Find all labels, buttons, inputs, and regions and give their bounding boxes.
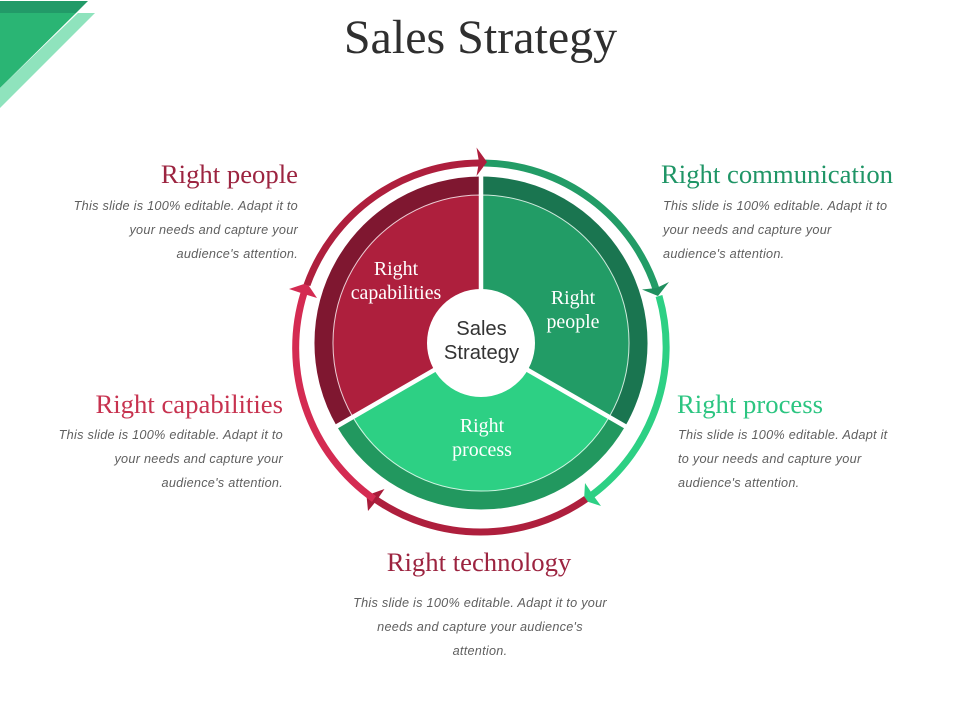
panel: right process text: This slide is 100% editable. Adapt it	[678, 428, 888, 442]
panel: right process text	[677, 389, 888, 490]
label: right people	[546, 287, 600, 333]
chart: segmented circle	[314, 172, 648, 510]
panel: right communication text: audience's attention.	[663, 247, 784, 261]
panel: right people text: your needs and capture your	[128, 223, 299, 237]
panel: right process text: to your needs and capture your	[678, 452, 862, 466]
segment: bottom	[337, 343, 625, 510]
arrow: pink	[289, 283, 374, 499]
panel: right capabilities text: This slide is 100% editable. Adapt it to	[59, 428, 283, 442]
arrow: dark red	[307, 148, 487, 285]
arrow: green	[484, 163, 669, 296]
label: right capabilities: Right	[374, 258, 419, 280]
label: right process: Right	[460, 415, 505, 437]
center label: Strategy	[444, 342, 520, 364]
label: right capabilities: capabilities	[351, 282, 442, 304]
panel: right technology text	[353, 547, 607, 658]
center circle	[427, 289, 535, 397]
panel: right technology text: needs and capture your audience's	[377, 620, 583, 634]
panel: right people text: audience's attention.	[177, 247, 298, 261]
panel: right people text: This slide is 100% editable. Adapt it to	[74, 199, 298, 213]
panel: right capabilities text: audience's attention.	[162, 476, 283, 490]
panel: right people text	[74, 159, 299, 261]
panel: right technology text: attention.	[453, 644, 507, 658]
center label: Sales	[456, 318, 507, 340]
corner decoration	[0, 1, 95, 108]
segment: top left	[314, 176, 481, 426]
panel: right capabilities text	[59, 389, 284, 490]
segment: top right	[481, 176, 648, 426]
panel: right process text: Right process	[677, 389, 823, 419]
label: right people: people	[546, 311, 600, 333]
panel: right capabilities text: your needs and capture your	[113, 452, 284, 466]
label: right capabilities	[351, 258, 442, 304]
panel: right capabilities text: Right capabilities	[95, 389, 283, 419]
panel: right technology text: Right technology	[387, 547, 572, 577]
panel: right communication text	[661, 159, 893, 261]
panel: right technology text: This slide is 100% editable. Adapt it to your	[353, 596, 607, 610]
panel: right communication text: This slide is 100% editable. Adapt it to	[663, 199, 887, 213]
panel: right process text: audience's attention.	[678, 476, 799, 490]
label: right people: Right	[551, 287, 596, 309]
title: Sales Strategy	[344, 11, 617, 64]
panel: right communication text: Right communication	[661, 159, 893, 189]
arrow: light green	[584, 296, 666, 506]
label: right process	[452, 415, 512, 461]
center label	[444, 318, 520, 364]
panel: right people text: Right people	[161, 159, 298, 189]
label: right process: process	[452, 439, 512, 461]
arrow: crimson	[366, 489, 586, 532]
panel: right communication text: your needs and capture your	[662, 223, 832, 237]
